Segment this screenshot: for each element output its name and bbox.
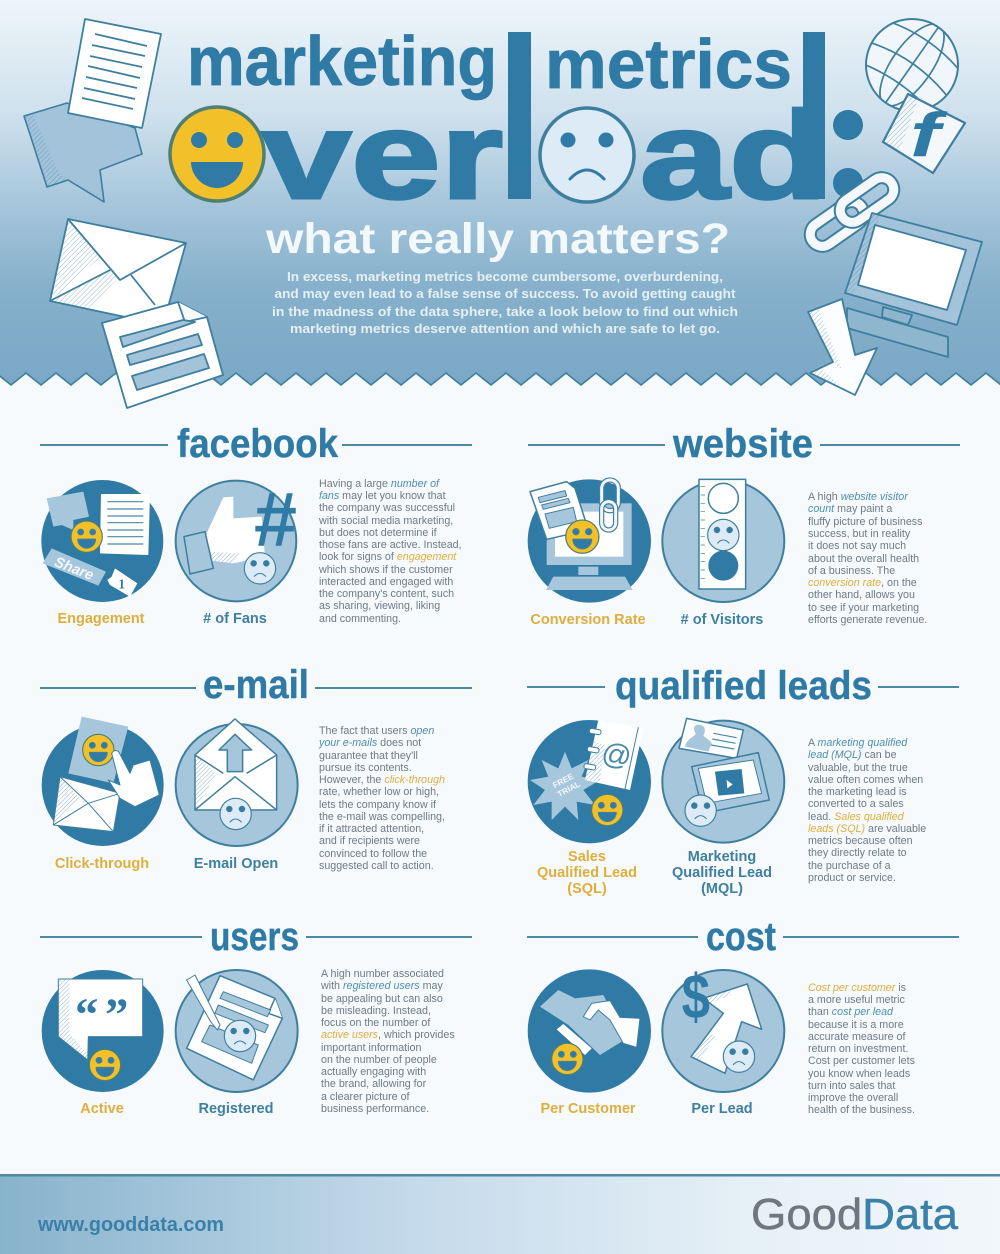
title: marketing: marketing: [187, 22, 497, 100]
footer url: www.gooddata.com: [37, 1214, 224, 1236]
text: e-mail body: the e-mail was compelling,: [319, 811, 445, 823]
text: e-mail body: and if recipients were: [319, 835, 420, 847]
text: qualified leads body: [808, 737, 926, 884]
text: website body: conversion rate, on the: [808, 577, 917, 589]
icon: envelope: [50, 219, 186, 325]
intro paragraph: in the madness of the data sphere, take a look below to find out which: [272, 305, 738, 319]
text: qualified leads body: they directly relate to: [808, 847, 907, 859]
icon: per lead: [662, 962, 784, 1092]
label: e-mail open: E-mail Open: [194, 856, 278, 872]
text: e-mail body: suggested call to action.: [319, 860, 434, 872]
text: qualified leads body: product or service.: [808, 872, 896, 884]
title: colon: [833, 110, 863, 198]
text: website body: efforts generate revenue.: [808, 614, 927, 626]
text: e-mail body: convinced to follow the: [319, 848, 427, 860]
icon: e-mail open: [176, 719, 298, 846]
text: website body: it does not say much: [808, 540, 906, 552]
label: per lead: Per Lead: [691, 1101, 753, 1117]
text: website body: count may paint a: [808, 503, 892, 515]
label: fans: # of Fans: [203, 611, 267, 627]
text: users body: focus on the number of: [321, 1017, 430, 1029]
text: facebook body: interacted and engaged with: [319, 576, 453, 588]
text: e-mail body: [318, 725, 445, 872]
heading: facebook: facebook: [177, 422, 339, 466]
footer rule: [0, 1174, 1000, 1176]
text: qualified leads body: A marketing qualified: [808, 737, 908, 749]
text: website body: about the overall health: [808, 553, 919, 565]
logo: GoodData: GoodData: [751, 1190, 959, 1239]
text: website body: fluffy picture of business: [808, 516, 922, 528]
label: marketing qualified lead: Marketing: [688, 849, 756, 865]
text: e-mail body: The fact that users open: [319, 725, 434, 737]
text: users body: on the number of people: [321, 1054, 437, 1066]
text: facebook body: Having a large number of: [319, 478, 440, 490]
icon: sales qualified lead: TRIAL: [556, 779, 582, 799]
icon: marketing qualified lead: [662, 718, 784, 843]
text: website body: to see if your marketing: [808, 602, 919, 614]
text: e-mail body: your e-mails does not: [318, 737, 421, 749]
panel: e-mail: [40, 663, 472, 872]
icon: engagement: 1: [118, 576, 125, 591]
text: e-mail body: However, the click-through: [319, 774, 445, 786]
intro paragraph: marketing metrics deserve attention and which are safe to let go.: [290, 322, 720, 336]
icon: click-through: [42, 717, 164, 846]
text: users body: be appealing but can also: [321, 993, 443, 1005]
label: engagement: Engagement: [57, 611, 145, 627]
icon: facebook tile: [883, 94, 965, 173]
icon: per customer: [528, 969, 651, 1093]
footer band: [0, 1176, 1000, 1254]
text: cost body: turn into sales that: [808, 1080, 895, 1092]
label: marketing qualified lead: Qualified Lead: [672, 865, 772, 881]
text: users body: active users, which provides: [321, 1029, 455, 1041]
text: e-mail body: pursue its contents.: [319, 762, 412, 774]
label: registered: Registered: [199, 1101, 273, 1117]
text: cost body: health of the business.: [808, 1104, 915, 1116]
icon: globe: [865, 18, 959, 110]
text: cost body: [808, 982, 915, 1116]
text: users body: [320, 968, 455, 1115]
text: facebook body: with social media marketing,: [318, 515, 453, 527]
icon: speech bubble: [24, 103, 142, 202]
text: users body: A high number associated: [321, 968, 444, 980]
icon: sales qualified lead: [528, 720, 651, 843]
text: qualified leads body: leads (SQL) are valuable: [808, 823, 926, 835]
text: cost body: improve the overall: [808, 1092, 898, 1104]
icon: down arrow: [808, 299, 877, 395]
label: conversion rate: Conversion Rate: [530, 612, 646, 628]
label: sales qualified lead: [537, 849, 637, 897]
text: website body: success, but in reality: [808, 528, 911, 540]
intro paragraph: In excess, marketing metrics become cumbersome, overburdening,: [287, 270, 723, 284]
icon: number of fans: [176, 477, 297, 601]
text: qualified leads body: value often comes when: [808, 774, 923, 786]
subtitle: what really matters?: [265, 215, 730, 263]
heading: cost: cost: [706, 915, 776, 959]
icon: conversion rate: [528, 479, 651, 603]
heading: qualified leads: qualified leads: [615, 664, 872, 708]
title: l: [508, 32, 531, 199]
label: sales qualified lead: Qualified Lead: [537, 865, 637, 881]
icon: computer monitor: [845, 213, 982, 357]
icon: sales qualified lead: @: [599, 736, 634, 774]
icon: active: [42, 970, 164, 1092]
intro paragraph: and may even lead to a false sense of success. To avoid getting caught: [274, 287, 736, 301]
text: facebook body: and commenting.: [319, 613, 401, 625]
text: facebook body: which shows if the customer: [318, 564, 453, 576]
text: website body: [808, 491, 927, 626]
icon: form document: [102, 302, 223, 408]
icon: engagement: Share: [52, 554, 96, 584]
text: facebook body: those fans are active. Instead,: [319, 539, 462, 551]
text: cost body: Cost per customer is: [808, 982, 906, 994]
text: facebook body: as sharing, viewing, liking: [319, 600, 440, 612]
text: facebook body: look for signs of engagement: [319, 551, 457, 563]
text: facebook body: fans may let you know that: [319, 490, 446, 502]
icon: document: [68, 19, 161, 128]
text: website body: other hand, allows you: [808, 589, 915, 601]
icon: visitors: [662, 479, 784, 602]
icon: sales qualified lead: FREE: [551, 771, 576, 790]
text: qualified leads body: valuable, but the true: [808, 762, 908, 774]
icon: active: “ ”: [75, 989, 128, 1041]
text: facebook body: the company was successful: [319, 502, 455, 514]
text: cost body: you know when leads: [808, 1068, 910, 1080]
text: users body: with registered users may: [320, 980, 443, 992]
icon: facebook tile: f: [910, 101, 948, 170]
text: facebook body: [318, 478, 462, 625]
intro paragraph: [272, 270, 738, 336]
icon: per lead: $: [682, 962, 710, 1032]
text: cost body: a more useful metric: [808, 994, 905, 1006]
text: users body: be misleading. Instead,: [321, 1005, 431, 1017]
text: users body: important information: [321, 1042, 421, 1054]
text: qualified leads body: the purchase of a: [808, 860, 891, 872]
label: click-through: Click-through: [55, 856, 149, 872]
text: facebook body: the company's content, such: [319, 588, 454, 600]
text: qualified leads body: converted to a sales: [808, 798, 904, 810]
panel: qualified leads: [527, 664, 959, 897]
heading: website: website: [672, 422, 813, 466]
icon: frown replacing o: [540, 108, 634, 202]
text: qualified leads body: the marketing lead is: [808, 786, 907, 798]
label: sales qualified lead: Sales: [568, 849, 606, 865]
title: ver: ver: [262, 87, 503, 225]
title: metrics: metrics: [545, 25, 792, 103]
icon: smile replacing o: [170, 107, 264, 201]
text: cost body: because it is a more: [808, 1019, 904, 1031]
panel: facebook: [40, 422, 472, 627]
text: cost body: return on investment.: [808, 1043, 908, 1055]
text: facebook body: but does not determine if: [319, 527, 437, 539]
heading: users: users: [210, 915, 299, 959]
label: sales qualified lead: (SQL): [567, 881, 607, 897]
text: e-mail body: rate, whether low or high,: [319, 786, 439, 798]
label: marketing qualified lead: (MQL): [701, 881, 743, 897]
text: cost body: Cost per customer lets: [808, 1055, 915, 1067]
title: d stem: [803, 32, 825, 199]
text: website body: A high website visitor: [808, 491, 908, 503]
heading: e-mail: e-mail: [203, 663, 309, 707]
header band with zigzag edge: [0, 0, 1000, 385]
label: visitors: # of Visitors: [681, 612, 763, 628]
text: users body: a clearer picture of: [321, 1091, 410, 1103]
text: cost body: accurate measure of: [808, 1031, 905, 1043]
icon: registered: [176, 970, 298, 1092]
text: qualified leads body: metrics because often: [808, 835, 913, 847]
text: users body: the brand, allowing for: [321, 1078, 427, 1090]
icon: chain links: [806, 173, 898, 251]
label: active: Active: [80, 1101, 124, 1117]
panel: users: [40, 915, 472, 1117]
text: cost body: than cost per lead: [808, 1006, 894, 1018]
text: e-mail body: guarantee that they'll: [319, 750, 418, 762]
text: e-mail body: lets the company know if: [319, 799, 436, 811]
text: users body: actually engaging with: [321, 1066, 426, 1078]
icon: number of fans: #: [254, 477, 297, 563]
icon: engagement: [41, 480, 163, 602]
panel: cost: [527, 915, 959, 1117]
text: website body: of a business. The: [808, 565, 895, 577]
label: marketing qualified lead: [672, 849, 772, 897]
panel: website: [528, 422, 960, 628]
label: per customer: Per Customer: [540, 1101, 636, 1117]
title: ad: ad: [640, 87, 827, 225]
text: users body: business performance.: [321, 1103, 429, 1115]
text: qualified leads body: lead. Sales qualified: [808, 811, 905, 823]
text: qualified leads body: lead (MQL) can be: [808, 749, 897, 761]
text: e-mail body: if it attracted attention,: [319, 823, 424, 835]
